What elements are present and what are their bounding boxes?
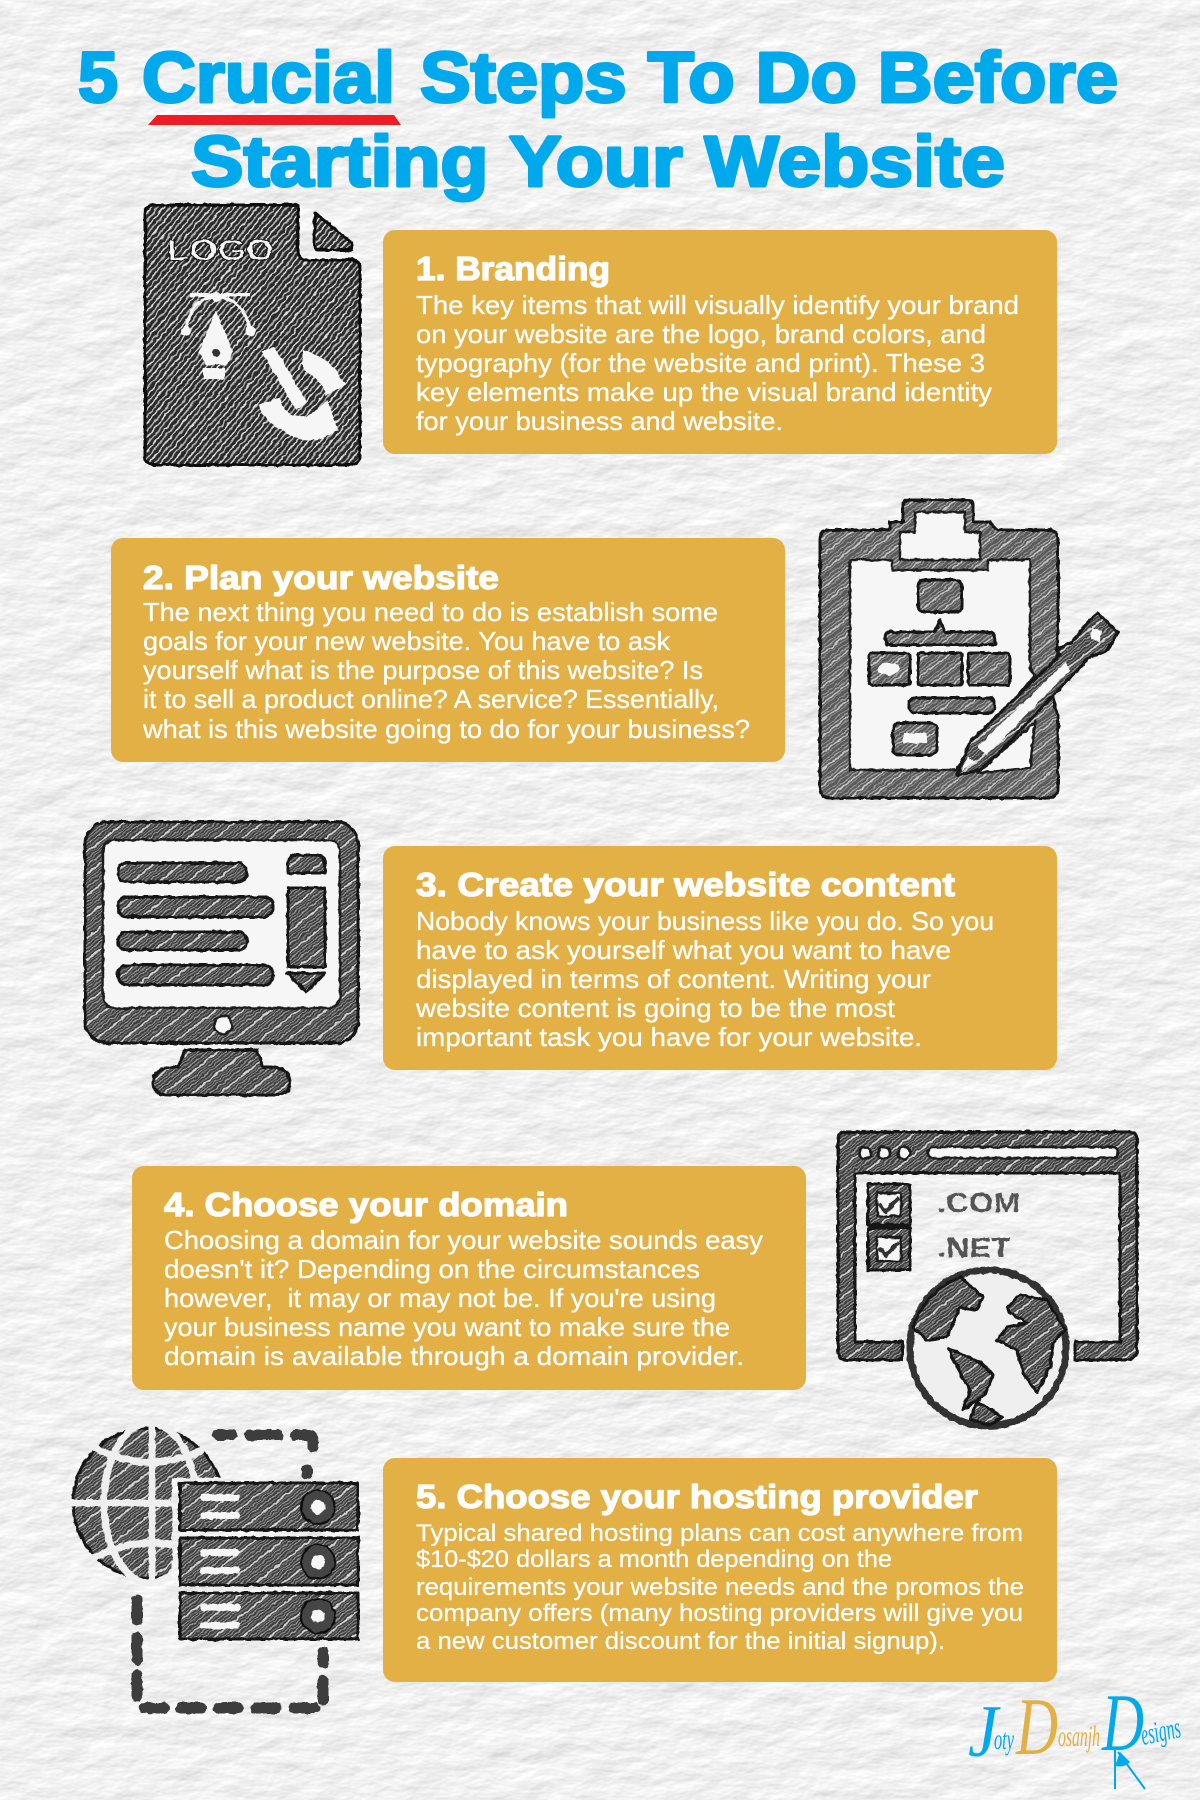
icon: globe and server stack — [70, 1420, 358, 1708]
logo: Joty Dosanjh Designs: oty — [994, 1723, 1014, 1756]
text block: domain body: doesn't it? Depending on the circumstances — [164, 1254, 700, 1284]
text block: domain body: domain is available through a domain provider. — [164, 1341, 744, 1371]
text block: Branding body: The key items that will visually identify your brand — [416, 290, 1019, 320]
text block: Plan body: it to sell a product online? A service? Essentially, — [143, 684, 719, 714]
logo: Joty Dosanjh Designs: osanjh — [1058, 1720, 1100, 1753]
icon: browser window with domains and globe — [838, 1132, 1137, 1426]
panel: 3. Create your website content — [383, 846, 1057, 1070]
panel: 4. Choose your domain — [132, 1166, 806, 1390]
text block: Plan body: goals for your new website. You have to ask — [143, 626, 671, 656]
heading: 2. Plan your website: 2. Plan your website — [143, 559, 499, 596]
icon: logo design file: LOGO — [167, 234, 274, 267]
text block: domain body — [164, 1225, 763, 1371]
title: Starting Your Website — [191, 123, 1005, 202]
title: 5 — [78, 39, 118, 118]
title: Crucial — [142, 39, 395, 118]
server 3 — [180, 1593, 358, 1639]
text block: hosting body — [416, 1520, 1024, 1655]
text block: Plan body: what is this website going to do for your business? — [142, 714, 750, 744]
heading: 1. Branding: 1. Branding — [416, 250, 610, 287]
text block: Branding body: key elements make up the visual brand identity — [416, 377, 992, 407]
icon: browser window with domains and globe: .NET — [937, 1232, 1011, 1263]
text block: hosting body: requirements your website needs and the promos the — [416, 1574, 1024, 1601]
title: Steps To Do Before — [420, 39, 1118, 118]
panel: 5. Choose your hosting provider — [383, 1458, 1057, 1682]
heading: 4. Choose your domain: 4. Choose your domain — [164, 1186, 568, 1223]
heading: 5. Choose your hosting provider: 5. Choose your hosting provider — [416, 1478, 978, 1515]
text block: content body — [415, 906, 994, 1052]
text block: content body: website content is going to be the most — [415, 993, 896, 1023]
text block: content body: Nobody knows your business like you do. So you — [416, 906, 994, 936]
text block: Branding body: on your website are the logo, brand colors, and — [416, 319, 986, 349]
text block: Branding body: typography (for the website and print). These 3 — [416, 348, 985, 378]
logo: Joty Dosanjh Designs: J — [968, 1691, 1001, 1773]
icon: browser window with domains and globe: .COM — [937, 1187, 1020, 1218]
text block: hosting body: company offers (many hosting providers will give you — [416, 1600, 1023, 1627]
text block: Plan body: yourself what is the purpose of this website? Is — [143, 655, 703, 685]
server 1 — [180, 1483, 358, 1530]
text block: hosting body: Typical shared hosting plans can cost anywhere from — [416, 1520, 1023, 1547]
icon: clipboard with pen — [820, 500, 1118, 798]
icon: logo design file — [145, 205, 360, 465]
globe — [70, 1420, 226, 1585]
dashed frame — [137, 1435, 323, 1708]
title — [78, 39, 1118, 202]
text block: hosting body: a new customer discount for the initial signup). — [416, 1628, 945, 1655]
text block: domain body: however, it may or may not be. If you're using — [164, 1283, 716, 1313]
text block: content body: displayed in terms of content. Writing your — [416, 964, 931, 994]
icon: monitor with page layout — [85, 822, 358, 1095]
text block: Plan body — [142, 597, 750, 744]
logo: Joty Dosanjh Designs: D — [1101, 1677, 1144, 1768]
text block: Branding body: for your business and website. — [416, 406, 783, 436]
text block: Plan body: The next thing you need to do is establish some — [143, 597, 718, 627]
heading: 3. Create your website content: 3. Create your website content — [416, 866, 955, 903]
red underline — [148, 115, 401, 125]
server 2 — [180, 1538, 358, 1585]
panel: 1. Branding — [383, 230, 1057, 454]
panel: 2. Plan your website — [111, 538, 785, 762]
text block: content body: important task you have for your website. — [416, 1022, 922, 1052]
text block: domain body: your business name you want to make sure the — [164, 1312, 730, 1342]
text block: content body: have to ask yourself what you want to have — [416, 935, 951, 965]
text block: hosting body: $10-$20 dollars a month depending on the — [416, 1546, 892, 1573]
text block: domain body: Choosing a domain for your website sounds easy — [164, 1225, 763, 1255]
logo: Joty Dosanjh Designs: D — [1015, 1681, 1058, 1772]
logo: Joty Dosanjh Designs — [968, 1677, 1184, 1789]
text block: Branding body — [416, 290, 1019, 436]
